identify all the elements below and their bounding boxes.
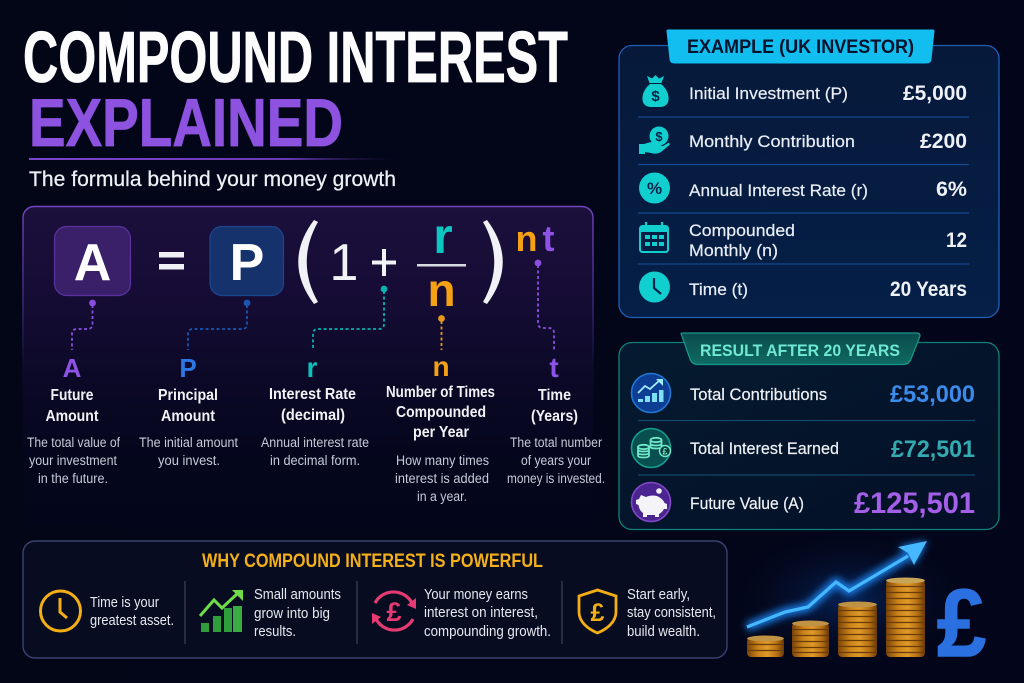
term: n times compounded: in a year. bbox=[417, 489, 467, 504]
term: A future amount bbox=[27, 353, 120, 486]
row: time: Time (t) bbox=[689, 280, 748, 299]
example heading tab: EXAMPLE (UK INVESTOR) bbox=[687, 36, 914, 58]
result heading tab bbox=[681, 333, 920, 364]
term: r interest rate: r bbox=[307, 352, 318, 383]
panel: example UK investor bbox=[619, 31, 999, 318]
term: P principal amount: P bbox=[179, 353, 197, 383]
connector: P bbox=[188, 300, 250, 350]
icon: growth chart bbox=[632, 374, 670, 412]
icon: green bars and arrow bbox=[200, 590, 243, 632]
row: monthly contribution: Monthly Contribution bbox=[689, 132, 855, 151]
term: t time: (Years) bbox=[531, 408, 578, 425]
example heading tab bbox=[668, 31, 933, 62]
term: r interest rate: Interest Rate bbox=[269, 386, 356, 403]
formula: P box: P bbox=[230, 234, 264, 292]
term: r interest rate: Annual interest rate bbox=[261, 435, 369, 450]
row: time: 20 Years bbox=[890, 278, 967, 301]
title bbox=[23, 18, 568, 161]
term: r interest rate: (decimal) bbox=[281, 407, 345, 424]
icon: pound cycle bbox=[372, 592, 416, 630]
connector: t bbox=[535, 260, 554, 350]
icon: percent: % bbox=[647, 179, 662, 198]
term: n times compounded: per Year bbox=[413, 424, 469, 441]
row: total interest earned bbox=[632, 428, 975, 468]
formula: A box: A bbox=[74, 234, 111, 292]
formula: A box bbox=[54, 226, 130, 296]
term: t time: t bbox=[549, 352, 559, 383]
icon: coin stacks bbox=[632, 428, 670, 468]
item: start early: build wealth. bbox=[627, 624, 700, 640]
term: r interest rate bbox=[261, 352, 369, 468]
formula: exponent nt bbox=[516, 218, 554, 259]
term: n times compounded: Compounded bbox=[396, 404, 486, 421]
row: future value: £125,501 bbox=[854, 487, 975, 520]
term: P principal amount: you invest. bbox=[158, 453, 220, 468]
panel: result after 20 years bbox=[619, 333, 999, 530]
icon: clock bbox=[639, 272, 670, 302]
connector: n bbox=[438, 315, 445, 350]
term: A future amount: in the future. bbox=[38, 471, 108, 486]
item: time: Time is your bbox=[90, 595, 159, 611]
icon: hand with coin: $ bbox=[655, 129, 663, 144]
pound symbol: £ bbox=[937, 570, 986, 677]
result heading tab: RESULT AFTER 20 YEARS bbox=[700, 341, 900, 360]
term: n times compounded: interest is added bbox=[395, 471, 489, 486]
why heading: WHY COMPOUND INTEREST IS POWERFUL bbox=[202, 551, 543, 572]
term: n times compounded: How many times bbox=[396, 453, 489, 468]
row: annual interest rate: Annual Interest Rate (r) bbox=[689, 181, 868, 200]
term: t time: money is invested. bbox=[507, 471, 605, 486]
formula: exponent nt: n bbox=[516, 218, 538, 259]
item: time bbox=[40, 591, 174, 631]
icon: calendar bbox=[640, 222, 668, 252]
term: t time bbox=[507, 352, 605, 486]
row: compounded monthly bbox=[640, 221, 967, 260]
item: growth: Small amounts bbox=[254, 587, 341, 603]
row: monthly contribution bbox=[639, 126, 967, 154]
icon: pound shield: £ bbox=[591, 599, 605, 627]
panel: why compound interest is powerful bbox=[23, 541, 727, 658]
row: annual interest rate: 6% bbox=[936, 178, 967, 201]
icon: money bag bbox=[642, 75, 669, 107]
item: interest on interest: interest on interest, bbox=[424, 605, 538, 621]
icon: percent bbox=[639, 172, 670, 204]
term: t time: of years your bbox=[521, 453, 591, 468]
row: future value: Future Value (A) bbox=[690, 494, 804, 513]
term: A future amount: Amount bbox=[46, 408, 99, 425]
row: total contributions: Total Contributions bbox=[690, 385, 827, 404]
formula: one: 1 bbox=[330, 234, 358, 292]
connector: r bbox=[313, 286, 387, 350]
icon: clock outline bbox=[40, 591, 80, 631]
row: initial investment: £5,000 bbox=[903, 82, 967, 105]
row: compounded monthly: Compounded bbox=[689, 221, 795, 240]
term: P principal amount: Principal bbox=[158, 387, 218, 404]
term: P principal amount: Amount bbox=[161, 408, 216, 425]
formula: equals sign bbox=[159, 252, 184, 270]
formula: P box bbox=[210, 226, 284, 296]
title: EXPLAINED bbox=[29, 85, 343, 161]
icon: hand with coin bbox=[639, 126, 670, 154]
item: start early bbox=[579, 587, 716, 640]
term: A future amount: The total value of bbox=[27, 435, 120, 450]
icon: pound cycle: £ bbox=[386, 597, 402, 627]
formula: plus bbox=[372, 249, 396, 276]
coin stack 1 bbox=[747, 636, 784, 657]
row: initial investment bbox=[642, 75, 967, 107]
row: annual interest rate bbox=[639, 172, 967, 204]
coin stack 4 bbox=[886, 578, 925, 657]
term: n times compounded: n bbox=[432, 351, 450, 382]
row: compounded monthly: Monthly (n) bbox=[689, 241, 778, 260]
icon: piggy bank bbox=[632, 482, 670, 522]
item: interest on interest bbox=[372, 587, 551, 640]
item: growth: results. bbox=[254, 624, 296, 640]
row: compounded monthly: 12 bbox=[946, 229, 967, 252]
item: start early: Start early, bbox=[627, 587, 690, 603]
panel: formula bbox=[23, 206, 605, 526]
row: total interest earned: £72,501 bbox=[891, 436, 975, 463]
connector: A bbox=[72, 300, 96, 350]
term: n times compounded: Number of Times bbox=[386, 384, 495, 401]
icon: coin stacks: £ bbox=[662, 446, 668, 456]
title: COMPOUND INTEREST bbox=[23, 18, 568, 98]
term: t time: Time bbox=[538, 387, 571, 404]
item: interest on interest: Your money earns bbox=[424, 587, 528, 603]
item: interest on interest: compounding growth. bbox=[424, 624, 551, 640]
row: initial investment: Initial Investment (P) bbox=[689, 84, 848, 103]
item: start early: stay consistent, bbox=[627, 605, 716, 621]
term: t time: The total number bbox=[510, 435, 602, 450]
growth arrow bbox=[747, 541, 927, 627]
term: A future amount: A bbox=[63, 353, 82, 383]
formula: n denominator: n bbox=[427, 264, 456, 316]
term: P principal amount: The initial amount bbox=[139, 435, 238, 450]
row: total contributions: £53,000 bbox=[890, 381, 975, 408]
formula: right parenthesis bbox=[483, 220, 503, 304]
coin stack 3 bbox=[838, 602, 877, 657]
term: A future amount: Future bbox=[50, 387, 94, 404]
item: time: greatest asset. bbox=[90, 613, 174, 629]
row: total contributions bbox=[632, 374, 975, 412]
formula: fraction bar bbox=[417, 264, 466, 266]
icon: money bag: $ bbox=[651, 88, 660, 105]
formula: left parenthesis bbox=[298, 220, 318, 304]
row: monthly contribution: £200 bbox=[920, 130, 967, 153]
row: time bbox=[639, 272, 967, 302]
term: r interest rate: in decimal form. bbox=[270, 453, 360, 468]
coin stack 2 bbox=[792, 620, 829, 657]
term: A future amount: your investment bbox=[29, 453, 117, 468]
term: n times compounded bbox=[386, 351, 495, 504]
formula: exponent nt: t bbox=[542, 218, 554, 259]
term: P principal amount bbox=[139, 353, 238, 468]
item: growth: grow into big bbox=[254, 606, 330, 622]
formula: r numerator: r bbox=[433, 208, 453, 264]
row: future value bbox=[632, 482, 975, 522]
item: growth bbox=[200, 587, 341, 640]
row: total interest earned: Total Interest Earned bbox=[690, 439, 839, 458]
illustration: coins, arrow and pound bbox=[725, 525, 986, 677]
subtitle: The formula behind your money growth bbox=[29, 168, 396, 191]
